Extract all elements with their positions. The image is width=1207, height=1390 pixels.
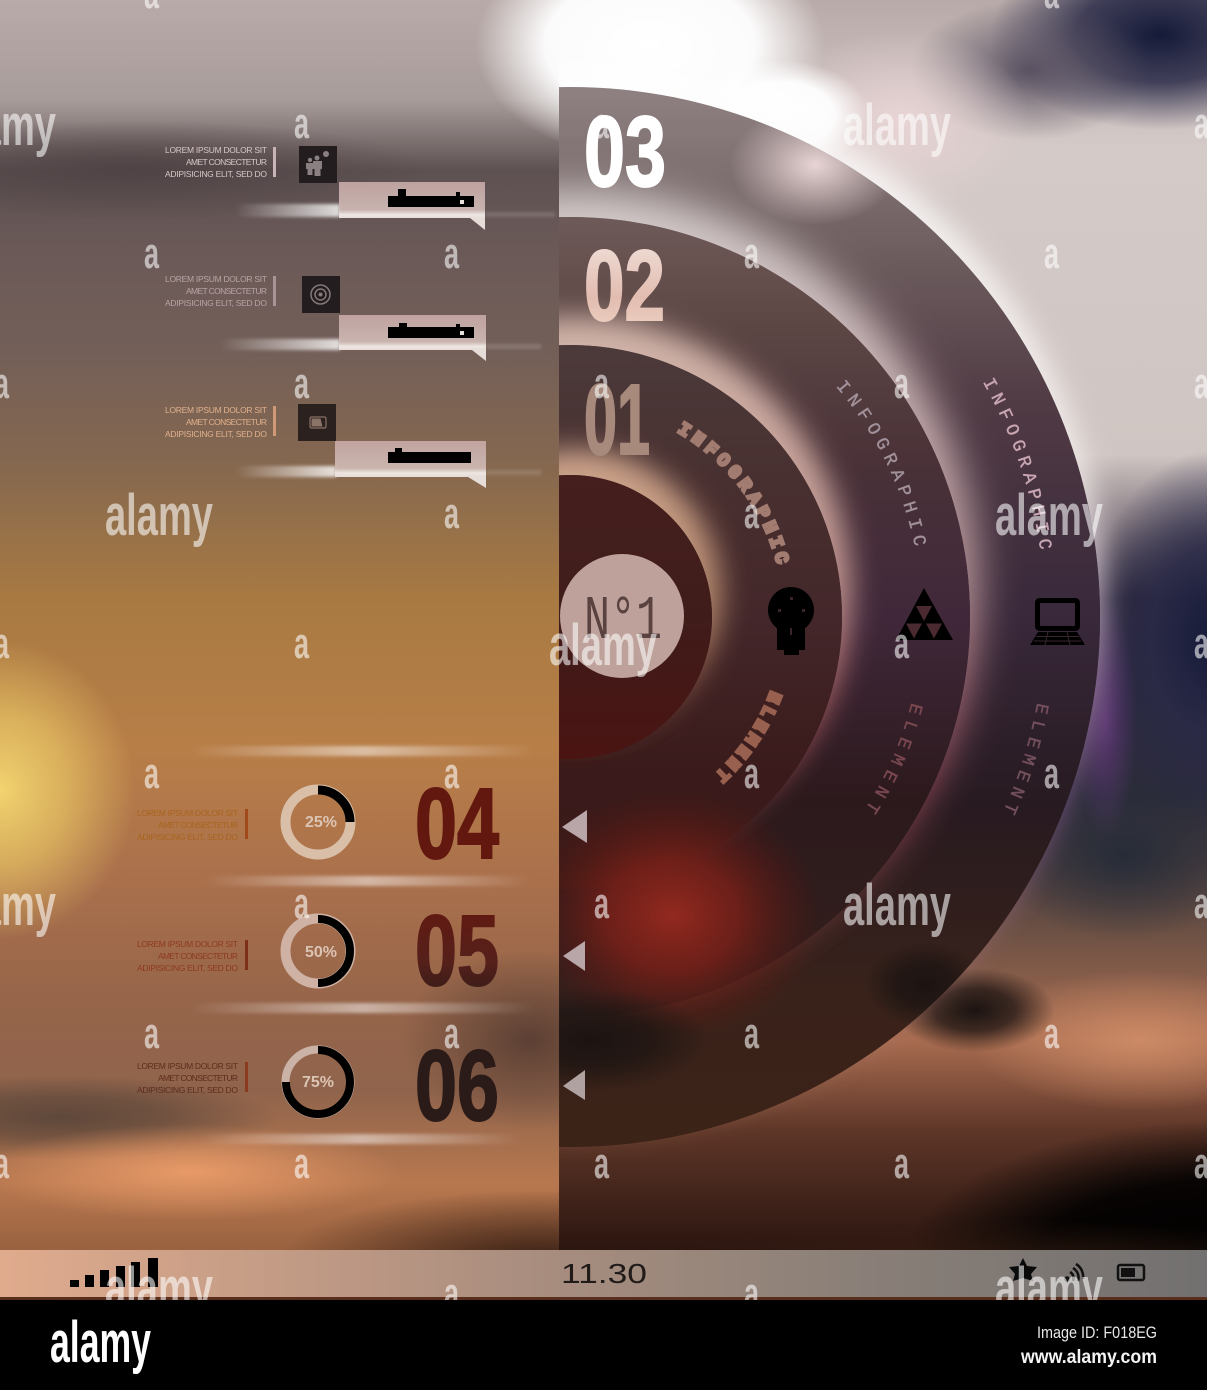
- ring: middle half disc: [559, 217, 970, 924]
- item 05 row: [137, 895, 499, 1007]
- stock watermarks: a: [1044, 749, 1059, 798]
- number 05: 05: [415, 895, 499, 1007]
- caption: AMET CONSECTETUR: [186, 286, 267, 296]
- caption: [165, 145, 267, 179]
- stock watermarks: a: [744, 1009, 759, 1058]
- caption: ADIPISICING ELIT, SED DO: [165, 169, 267, 179]
- icon: laptop: [1030, 600, 1085, 645]
- arc labels: outer ring: INFOGRAPHIC: [983, 378, 1052, 550]
- black bar: [388, 448, 471, 463]
- shade: dark patch lower right: [877, 952, 968, 1018]
- caption: LOREM IPSUM DOLOR SIT: [137, 808, 238, 818]
- arc labels: middle ring: [836, 380, 926, 815]
- stock watermarks: a: [294, 1139, 309, 1188]
- glow: inner ring crescent: [559, 430, 740, 738]
- icon: triangle pyramid: [896, 588, 953, 640]
- caption: [137, 808, 238, 842]
- stock watermarks: a: [594, 359, 609, 408]
- stock watermarks: a: [144, 749, 159, 798]
- icon: target: [302, 276, 340, 313]
- item 04 row: [137, 768, 499, 880]
- stock watermarks: a: [744, 489, 759, 538]
- divider glares: [190, 746, 535, 1144]
- glare: [220, 339, 340, 350]
- stock watermarks: a: [744, 229, 759, 278]
- caption: LOREM IPSUM DOLOR SIT: [137, 1061, 238, 1071]
- stock watermarks: a: [444, 1269, 459, 1318]
- stock watermarks: a: [744, 1269, 759, 1318]
- arc labels: inner ring: ELEMENT: [716, 690, 784, 785]
- glow: red bokeh: [559, 808, 805, 1020]
- caption: [165, 274, 267, 308]
- caption: LOREM IPSUM DOLOR SIT: [165, 405, 267, 415]
- center badge: No 1: [560, 554, 684, 678]
- caption: AMET CONSECTETUR: [158, 951, 238, 961]
- caption: ADIPISICING ELIT, SED DO: [137, 963, 238, 973]
- arc labels: middle ring: ELEMENT: [868, 704, 923, 815]
- image id: Image ID: F018EG: [1037, 1323, 1157, 1342]
- donut 75%: [286, 1050, 350, 1114]
- glare: bright spot on outer ring: [736, 124, 884, 220]
- arc labels: outer ring: ELEMENT: [1005, 704, 1049, 816]
- caption: [137, 939, 238, 973]
- step number 02: 02: [584, 230, 665, 342]
- black bar: [388, 189, 474, 207]
- glow: middle ring crescent: [559, 298, 871, 836]
- arc labels: outer ring: [983, 378, 1052, 816]
- speech bubble: [335, 441, 486, 488]
- arrow: row 04: [562, 810, 587, 843]
- caption: [165, 405, 267, 439]
- status bar: [0, 1250, 1207, 1300]
- caption: ADIPISICING ELIT, SED DO: [165, 429, 267, 439]
- step number 03: 03: [584, 96, 666, 208]
- ring: outer half disc: [559, 87, 1100, 1147]
- center badge: No 1: N°1: [584, 586, 662, 657]
- glare right of bubble: [486, 344, 541, 349]
- stock watermarks: a: [594, 879, 609, 928]
- donut 50%: [286, 918, 350, 984]
- stock watermarks: a: [444, 749, 459, 798]
- ring: core half disc: [559, 475, 712, 759]
- glare: [235, 204, 340, 217]
- step number 01: 01: [584, 364, 650, 476]
- stock watermarks: a: [894, 1139, 909, 1188]
- item 06 row: [137, 1030, 499, 1142]
- caption: AMET CONSECTETUR: [158, 1073, 238, 1083]
- black bar: [388, 323, 474, 338]
- flare: white edge along disc shoulder: [725, 65, 864, 150]
- stock watermarks: a: [444, 489, 459, 538]
- caption: [137, 1061, 238, 1095]
- stock watermarks: a: [444, 229, 459, 278]
- caption: ADIPISICING ELIT, SED DO: [137, 1085, 238, 1095]
- stock watermarks: a: [444, 1009, 459, 1058]
- caption: AMET CONSECTETUR: [186, 157, 267, 167]
- caption rule: [245, 1062, 248, 1092]
- icon: wifi: [1066, 1264, 1083, 1281]
- donut 25%: 25%: [305, 814, 337, 831]
- shade: dark patch lower left: [559, 996, 688, 1082]
- caption rule: [273, 406, 276, 436]
- stock watermarks: alamy: [105, 483, 213, 548]
- item 03 row: [165, 145, 555, 230]
- stock watermarks: a: [594, 99, 609, 148]
- concentric half-disc diagram: [559, 65, 1124, 1147]
- number 06: 06: [415, 1030, 499, 1142]
- white flare top centre, behind the disc: [475, 0, 825, 160]
- footer logo: alamy: [50, 1310, 151, 1375]
- donut 50%: 50%: [305, 944, 337, 961]
- number 04: 04: [415, 768, 499, 880]
- stock watermarks: a: [294, 879, 309, 928]
- icon: light bulb: [768, 587, 814, 655]
- stock watermarks: a: [144, 229, 159, 278]
- glare right of bubble: [485, 212, 555, 217]
- stock watermarks: a: [1044, 229, 1059, 278]
- speech bubble: [339, 182, 485, 230]
- stock watermarks: a: [294, 99, 309, 148]
- icon: battery: [1118, 1265, 1144, 1280]
- caption rule: [273, 147, 276, 177]
- stock watermarks: alamy: [995, 483, 1103, 548]
- stock watermarks: a: [1044, 1009, 1059, 1058]
- glow: outer disc rim: [816, 139, 1124, 1024]
- caption: LOREM IPSUM DOLOR SIT: [137, 939, 238, 949]
- footer credit strip: [0, 1300, 1207, 1390]
- icon: battery card: [298, 404, 336, 441]
- ring: inner half disc: [559, 345, 842, 888]
- arc labels: inner ring: INFOGRAPHIC: [676, 420, 790, 565]
- stock watermarks: a: [894, 359, 909, 408]
- item 01 row: [165, 404, 541, 488]
- caption: AMET CONSECTETUR: [158, 820, 238, 830]
- stock watermarks: a: [294, 619, 309, 668]
- caption rule: [245, 809, 248, 839]
- glare right of bubble: [486, 470, 541, 475]
- stock watermarks: a: [144, 1009, 159, 1058]
- donut 75%: 75%: [302, 1074, 334, 1091]
- caption: LOREM IPSUM DOLOR SIT: [165, 274, 267, 284]
- stock watermarks: alamy: [843, 93, 951, 158]
- stock watermarks: alamy: [995, 1256, 1103, 1321]
- stock watermarks: a: [594, 1139, 609, 1188]
- icon: people: [299, 146, 337, 183]
- website: www.alamy.com: [1020, 1347, 1157, 1368]
- stock watermarks: alamy: [843, 873, 951, 938]
- glow: outer ring crescent: [559, 165, 1006, 974]
- arc labels: inner ring: [676, 420, 790, 785]
- item 02 row: [165, 274, 541, 361]
- caption: ADIPISICING ELIT, SED DO: [137, 832, 238, 842]
- clock: 11.30: [561, 1258, 647, 1289]
- signal strength icon: [70, 1258, 158, 1287]
- stock watermarks: alamy: [549, 613, 657, 678]
- caption rule: [273, 276, 276, 306]
- stock watermarks: a: [894, 619, 909, 668]
- arrow: row 05: [563, 941, 585, 971]
- caption: AMET CONSECTETUR: [186, 417, 267, 427]
- speech bubble: [339, 315, 486, 361]
- icon: star: [1009, 1258, 1037, 1281]
- caption rule: [245, 940, 248, 970]
- donut 25%: [286, 790, 350, 854]
- caption: ADIPISICING ELIT, SED DO: [165, 298, 267, 308]
- stock watermarks: alamy: [105, 1256, 213, 1321]
- stock watermarks: a: [294, 359, 309, 408]
- caption: LOREM IPSUM DOLOR SIT: [165, 145, 267, 155]
- glare: [235, 466, 336, 477]
- arrow: row 06: [563, 1070, 585, 1100]
- arc labels: middle ring: INFOGRAPHIC: [836, 380, 926, 546]
- stock watermarks: a: [744, 749, 759, 798]
